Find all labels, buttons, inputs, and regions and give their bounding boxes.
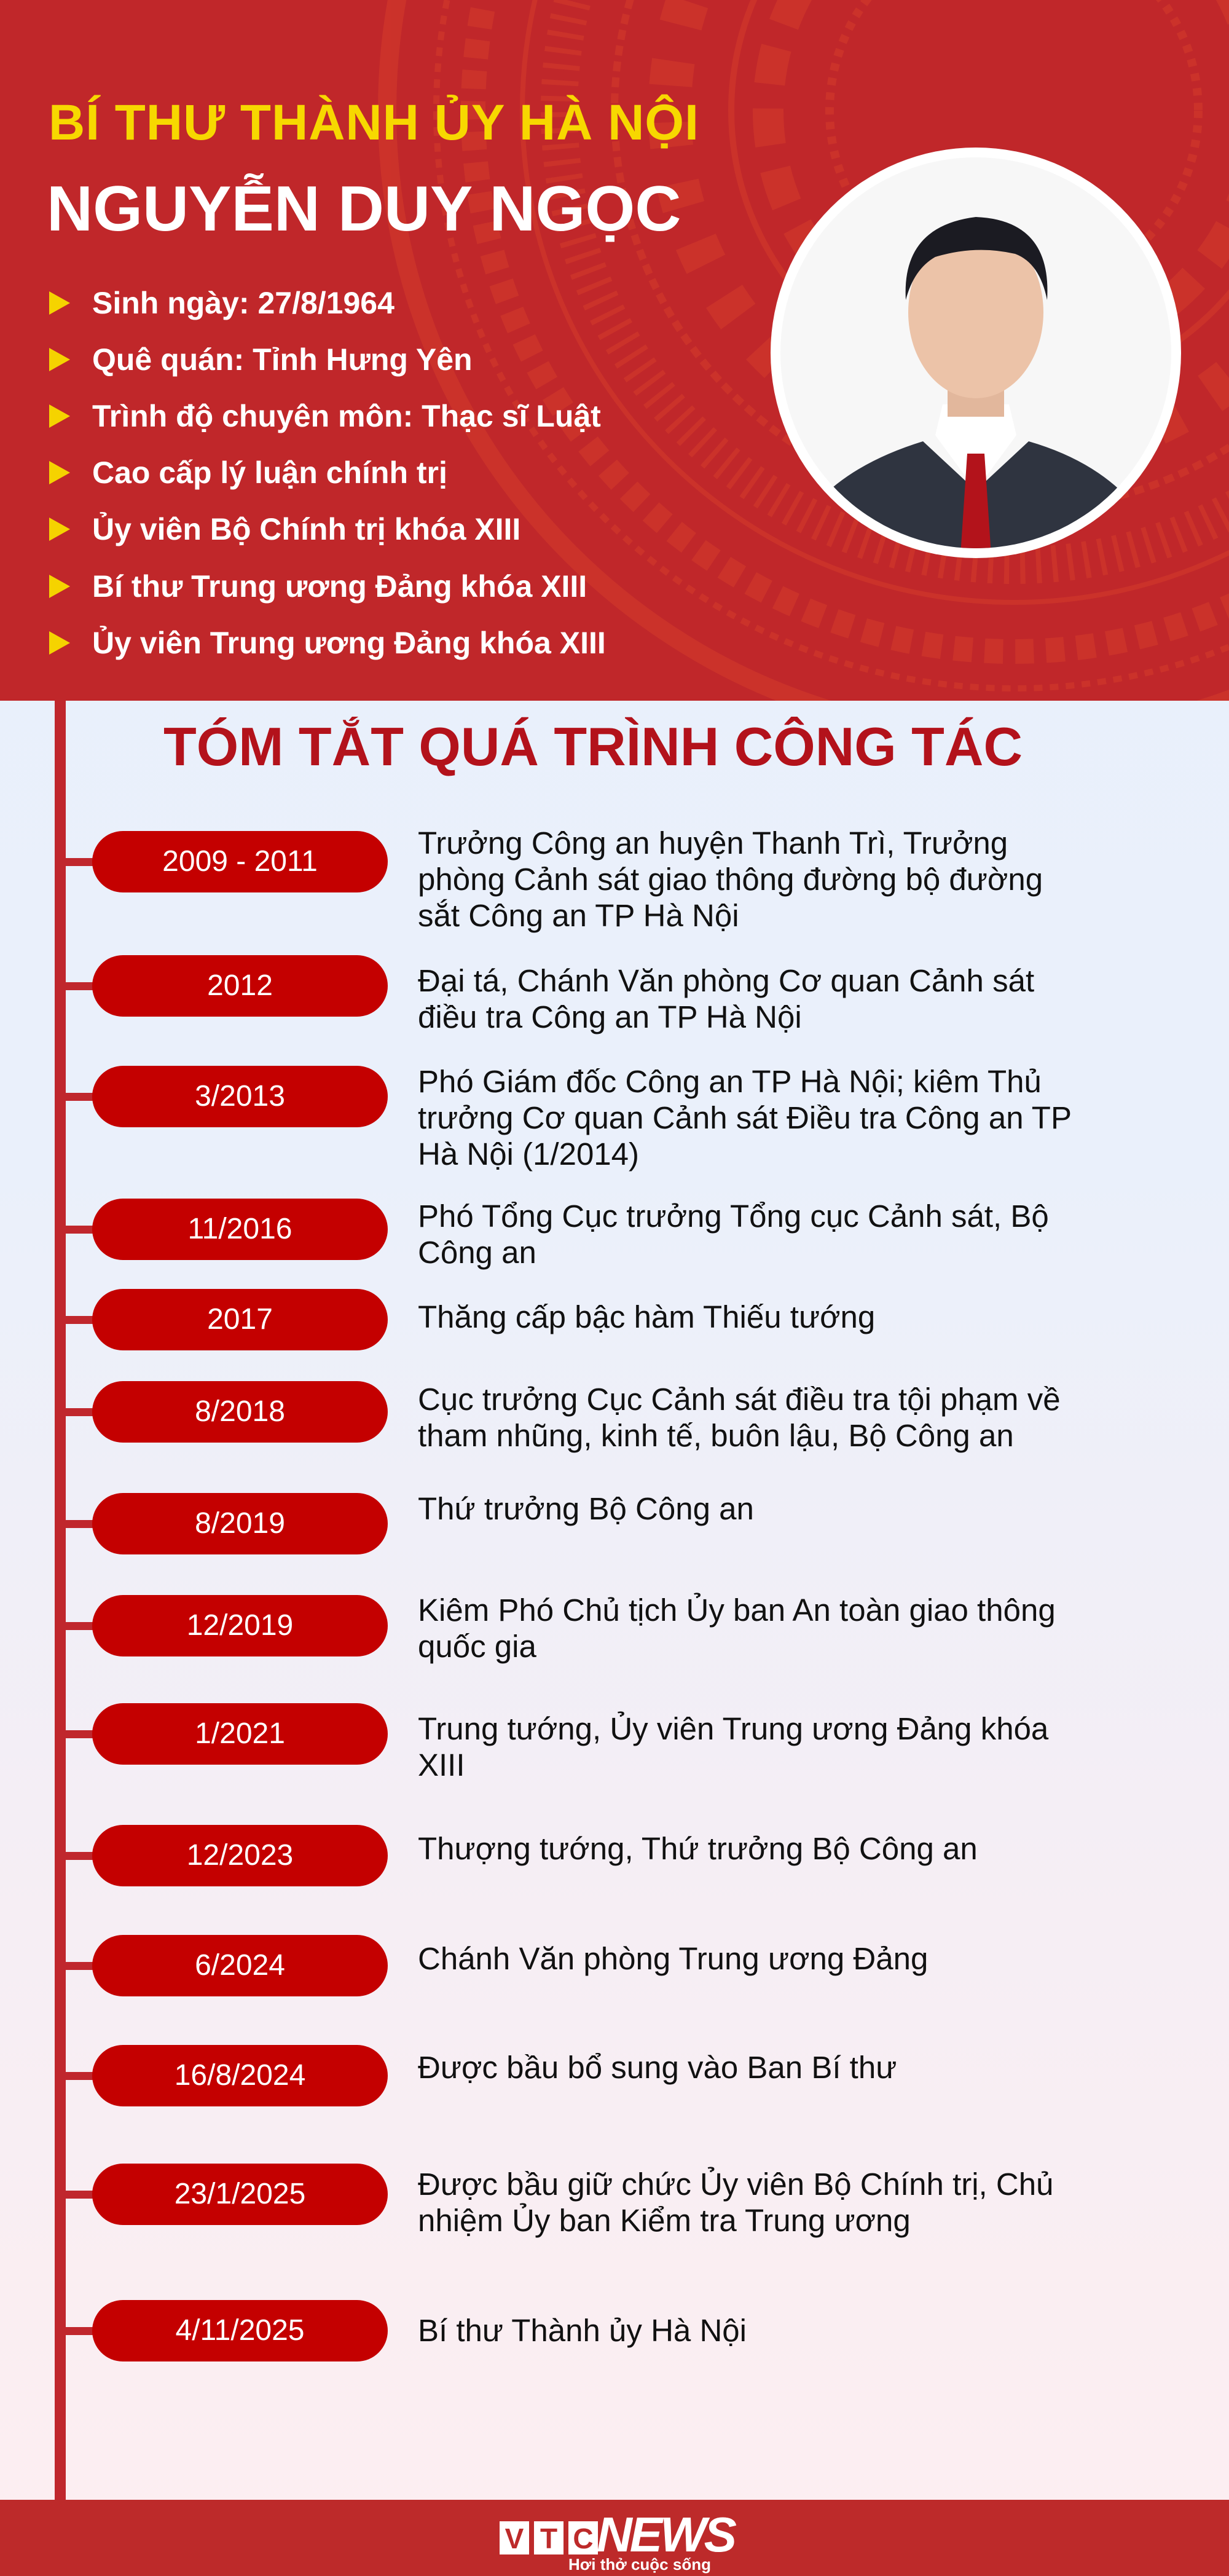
bullet list: Bí thư Trung ương Đảng khóa XIII xyxy=(92,569,587,604)
description: Bí thư Thành ủy Hà Nội xyxy=(418,2313,747,2348)
description: Được bầu bổ sung vào Ban Bí thư xyxy=(418,2050,897,2085)
timeline item 2017 xyxy=(66,1289,875,1350)
bullet: central committee xyxy=(49,626,606,660)
portrait xyxy=(771,148,1181,558)
bullet list: Sinh ngày: 27/8/1964 xyxy=(92,286,395,320)
pill: 1/2021 xyxy=(92,1703,388,1765)
description: Chánh Văn phòng Trung ương Đảng xyxy=(418,1941,928,1976)
timeline item 12/2023 xyxy=(66,1825,978,1886)
description: Hà Nội (1/2014) xyxy=(418,1136,639,1172)
description xyxy=(418,825,1043,933)
pill: 12/2023 xyxy=(92,1825,388,1886)
timeline item 3/2013 xyxy=(66,1064,1072,1172)
description: sắt Công an TP Hà Nội xyxy=(418,898,739,933)
bullet: education xyxy=(49,399,601,433)
description: Phó Tổng Cục trưởng Tổng cục Cảnh sát, Bộ xyxy=(418,1199,1049,1234)
logo: VTC NEWS xyxy=(500,2507,736,2574)
pill: 2012: 2012 xyxy=(207,969,273,1002)
pill: 12/2019 xyxy=(92,1595,388,1656)
description: Công an xyxy=(418,1235,536,1270)
timeline item 23/1/2025 xyxy=(66,2164,1053,2238)
timeline item 8/2019 xyxy=(66,1491,754,1554)
description: Trung tướng, Ủy viên Trung ương Đảng khóa xyxy=(418,1711,1048,1746)
description xyxy=(418,963,1034,1034)
timeline line xyxy=(55,701,66,2502)
description: điều tra Công an TP Hà Nội xyxy=(418,999,802,1034)
section heading: TÓM TẮT QUÁ TRÌNH CÔNG TÁC xyxy=(163,716,1023,777)
pill: 1/2021: 1/2021 xyxy=(195,1717,285,1750)
description: Kiêm Phó Chủ tịch Ủy ban An toàn giao thông xyxy=(418,1593,1056,1628)
description: Thăng cấp bậc hàm Thiếu tướng xyxy=(418,1299,875,1334)
header panel xyxy=(0,0,1229,701)
pill: 16/8/2024 xyxy=(92,2045,388,2106)
pill: 3/2013 xyxy=(92,1066,388,1127)
pill: 8/2019 xyxy=(92,1493,388,1554)
description xyxy=(418,1199,1049,1270)
pill: 8/2019: 8/2019 xyxy=(195,1507,285,1540)
description xyxy=(418,1593,1056,1664)
pill: 3/2013: 3/2013 xyxy=(195,1080,285,1113)
pill: 6/2024: 6/2024 xyxy=(195,1949,285,1982)
bullet list: Trình độ chuyên môn: Thạc sĩ Luật xyxy=(92,399,601,433)
logo: VTC NEWS: V xyxy=(505,2523,524,2554)
bullet list: Quê quán: Tỉnh Hưng Yên xyxy=(92,342,473,377)
title: BÍ THƯ THÀNH ỦY HÀ NỘI xyxy=(49,95,699,151)
pill: 4/11/2025 xyxy=(92,2300,388,2361)
pill: 2017 xyxy=(92,1289,388,1350)
description xyxy=(418,1711,1048,1782)
pill: 4/11/2025: 4/11/2025 xyxy=(176,2314,304,2347)
logo: VTC NEWS: Hơi thở cuộc sống xyxy=(568,2555,711,2574)
description: nhiệm Ủy ban Kiểm tra Trung ương xyxy=(418,2203,911,2238)
bullet: birth xyxy=(49,286,395,320)
pill: 23/1/2025 xyxy=(92,2164,388,2225)
logo: VTC NEWS: T xyxy=(540,2523,557,2554)
pill: 2012 xyxy=(92,955,388,1017)
pill: 23/1/2025: 23/1/2025 xyxy=(175,2178,305,2210)
bullet list: Ủy viên Trung ương Đảng khóa XIII xyxy=(92,626,606,660)
description: Đại tá, Chánh Văn phòng Cơ quan Cảnh sát xyxy=(418,963,1034,998)
pill: 8/2018 xyxy=(92,1381,388,1443)
pill: 16/8/2024: 16/8/2024 xyxy=(175,2059,305,2092)
timeline item 6/2024 xyxy=(66,1935,928,1996)
pill: 12/2023: 12/2023 xyxy=(187,1839,293,1872)
description: Thượng tướng, Thứ trưởng Bộ Công an xyxy=(418,1831,978,1866)
description: phòng Cảnh sát giao thông đường bộ đường xyxy=(418,862,1043,897)
description xyxy=(418,1064,1072,1172)
description: tham nhũng, kinh tế, buôn lậu, Bộ Công an xyxy=(418,1418,1014,1453)
timeline item 12/2019 xyxy=(66,1593,1056,1664)
description: Cục trưởng Cục Cảnh sát điều tra tội phạm về xyxy=(418,1382,1061,1417)
bullet: politics xyxy=(49,455,447,490)
timeline item 4/11/2025 xyxy=(66,2300,747,2361)
logo: VTC NEWS: C xyxy=(573,2523,594,2554)
pill: 2009 - 2011 xyxy=(92,831,388,892)
description: XIII xyxy=(418,1747,465,1782)
timeline item 11/2016 xyxy=(66,1199,1049,1270)
bullet: politburo xyxy=(49,512,520,546)
description: trưởng Cơ quan Cảnh sát Điều tra Công an TP xyxy=(418,1100,1072,1135)
bullet list: Ủy viên Bộ Chính trị khóa XIII xyxy=(92,512,520,546)
name: NGUYỄN DUY NGỌC xyxy=(47,173,681,245)
timeline item 16/8/2024 xyxy=(66,2045,897,2106)
bullet list xyxy=(49,286,606,660)
description xyxy=(418,2167,1053,2238)
description xyxy=(418,1382,1061,1453)
description: quốc gia xyxy=(418,1629,536,1664)
bullet: secretariat xyxy=(49,569,587,604)
timeline item 8/2018 xyxy=(66,1381,1061,1453)
pill: 2009 - 2011: 2009 - 2011 xyxy=(162,845,318,878)
description: Thứ trưởng Bộ Công an xyxy=(418,1491,754,1526)
description: Được bầu giữ chức Ủy viên Bộ Chính trị, Chủ xyxy=(418,2167,1053,2202)
decorative drum pattern xyxy=(378,0,1229,701)
pill: 11/2016 xyxy=(92,1199,388,1260)
description: Trưởng Công an huyện Thanh Trì, Trưởng xyxy=(418,825,1008,861)
pill: 2017: 2017 xyxy=(207,1303,273,1336)
pill: 6/2024 xyxy=(92,1935,388,1996)
timeline item 2009-2011 xyxy=(66,825,1043,933)
pill: 11/2016: 11/2016 xyxy=(188,1213,292,1245)
bullet: hometown xyxy=(49,342,473,377)
pill: 8/2018: 8/2018 xyxy=(195,1395,285,1428)
bullet list: Cao cấp lý luận chính trị xyxy=(92,455,447,490)
timeline item 1/2021 xyxy=(66,1703,1048,1782)
logo: VTC NEWS: NEWS xyxy=(597,2507,734,2562)
timeline item 2012 xyxy=(66,955,1034,1034)
footer xyxy=(0,2500,1229,2576)
pill: 12/2019: 12/2019 xyxy=(187,1609,293,1642)
description: Phó Giám đốc Công an TP Hà Nội; kiêm Thủ xyxy=(418,1064,1042,1099)
